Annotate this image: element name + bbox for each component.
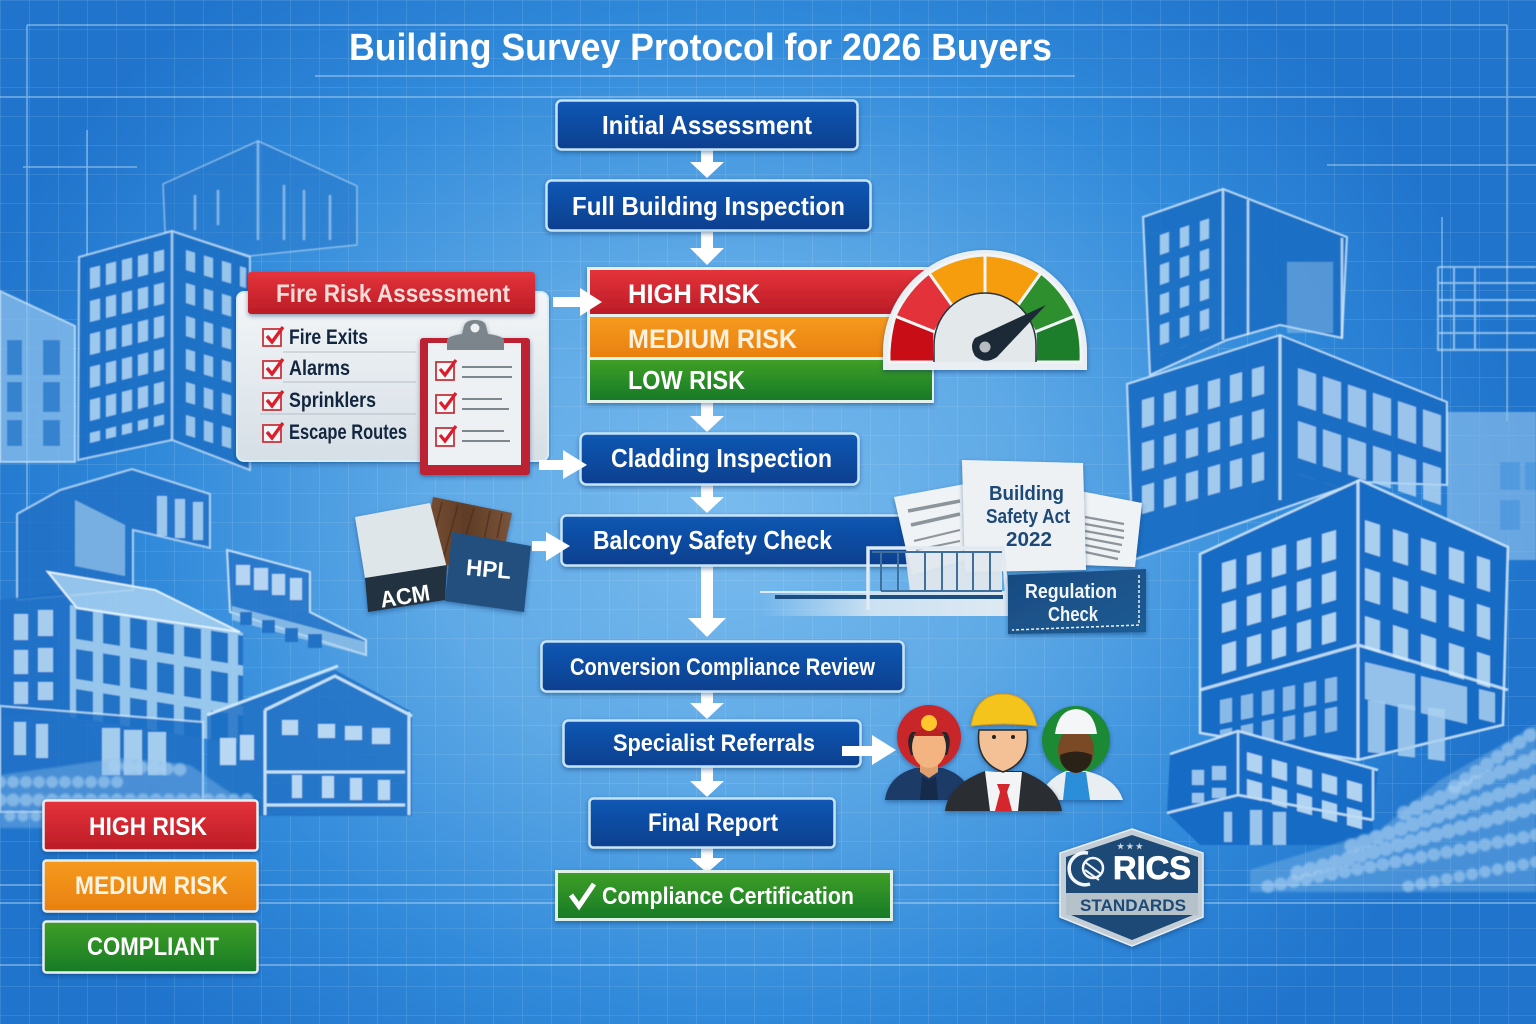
- document: building safety act: 2022: [1006, 529, 1052, 551]
- gauge needle: [972, 305, 1046, 361]
- step: balcony safety check: Balcony Safety Check: [593, 525, 832, 555]
- risk level bars: MEDIUM RISK: [628, 324, 797, 354]
- flow arrows: [688, 150, 726, 873]
- step: full building inspection: [546, 180, 870, 230]
- legend: medium risk: MEDIUM RISK: [75, 872, 228, 900]
- step: initial assessment: [556, 100, 858, 150]
- risk level bars: [587, 267, 934, 403]
- checklist items: Escape Routes: [289, 421, 407, 444]
- sample: HPL: HPL: [465, 554, 512, 584]
- document right: [1080, 491, 1142, 567]
- regulation check badge: [1008, 569, 1146, 634]
- sample: HPL: [445, 532, 531, 612]
- step: cladding inspection: [580, 434, 858, 484]
- panel header: Fire Risk Assessment: [276, 280, 511, 308]
- icon: surveyor with lab coat: [1040, 706, 1123, 800]
- legend: [44, 800, 258, 972]
- step: initial assessment: Initial Assessment: [602, 110, 812, 140]
- legend: compliant: [44, 922, 258, 972]
- RICS logo mark: [1069, 853, 1103, 885]
- legend: high risk: HIGH RISK: [89, 813, 207, 841]
- regulation check badge: Check: [1048, 604, 1099, 626]
- background buildings left: [0, 141, 412, 816]
- sample: ACM: [355, 503, 447, 613]
- step: balcony safety check: [562, 516, 912, 566]
- icon: firefighter: [885, 705, 972, 800]
- RICS standards badge: RICS: [1113, 850, 1191, 886]
- arrows between side panels and flow: [532, 288, 896, 765]
- step: compliance certification: [556, 872, 892, 920]
- step: specialist referrals: Specialist Referrals: [613, 730, 815, 757]
- legend: medium risk: [44, 860, 258, 912]
- title: Building Survey Protocol for 2026 Buyers: [349, 27, 1052, 69]
- trees: [0, 725, 1536, 892]
- legend: high risk: [44, 800, 258, 850]
- RICS standards badge: ★ ★ ★: [1117, 842, 1144, 851]
- balcony railing: [760, 548, 1010, 616]
- cladding material samples: [355, 497, 531, 613]
- step: final report: [590, 798, 834, 848]
- document: building safety act: Safety Act: [986, 506, 1070, 528]
- step: compliance certification: Compliance Certification: [602, 883, 854, 910]
- step: full building inspection: Full Building Inspection: [572, 191, 845, 221]
- risk level bars: LOW RISK: [628, 365, 745, 395]
- step: conversion compliance review: [542, 642, 904, 692]
- sample: ACM: ACM: [378, 579, 432, 613]
- step: final report: Final Report: [648, 809, 779, 837]
- background buildings right: [1127, 189, 1536, 845]
- checklist items: [263, 326, 407, 444]
- checklist items: Fire Exits: [289, 326, 368, 349]
- risk gauge: [883, 250, 1087, 370]
- step: specialist referrals: [564, 720, 860, 766]
- panel header: [248, 272, 535, 314]
- panel: fire risk assessment: [237, 272, 548, 475]
- document: building safety act: [962, 460, 1086, 572]
- RICS standards badge: [1060, 829, 1203, 946]
- step: cladding inspection: Cladding Inspection: [611, 443, 832, 473]
- risk level bars: HIGH RISK: [628, 279, 760, 309]
- balcony and regulation documents: [760, 460, 1146, 634]
- checklist items: Sprinklers: [289, 389, 376, 412]
- sample: wood: [420, 497, 512, 575]
- icon: manager in hard hat: [945, 694, 1062, 811]
- RICS standards badge: STANDARDS: [1080, 896, 1186, 915]
- document left: [894, 484, 965, 575]
- specialist people: [885, 694, 1123, 811]
- document: building safety act: Building: [989, 483, 1064, 505]
- step: conversion compliance review: Conversion Compliance Review: [570, 654, 875, 681]
- checklist items: Alarms: [289, 357, 350, 380]
- legend: compliant: COMPLIANT: [87, 933, 219, 961]
- regulation check badge: Regulation: [1025, 581, 1117, 603]
- icon: clipboard: [420, 320, 530, 475]
